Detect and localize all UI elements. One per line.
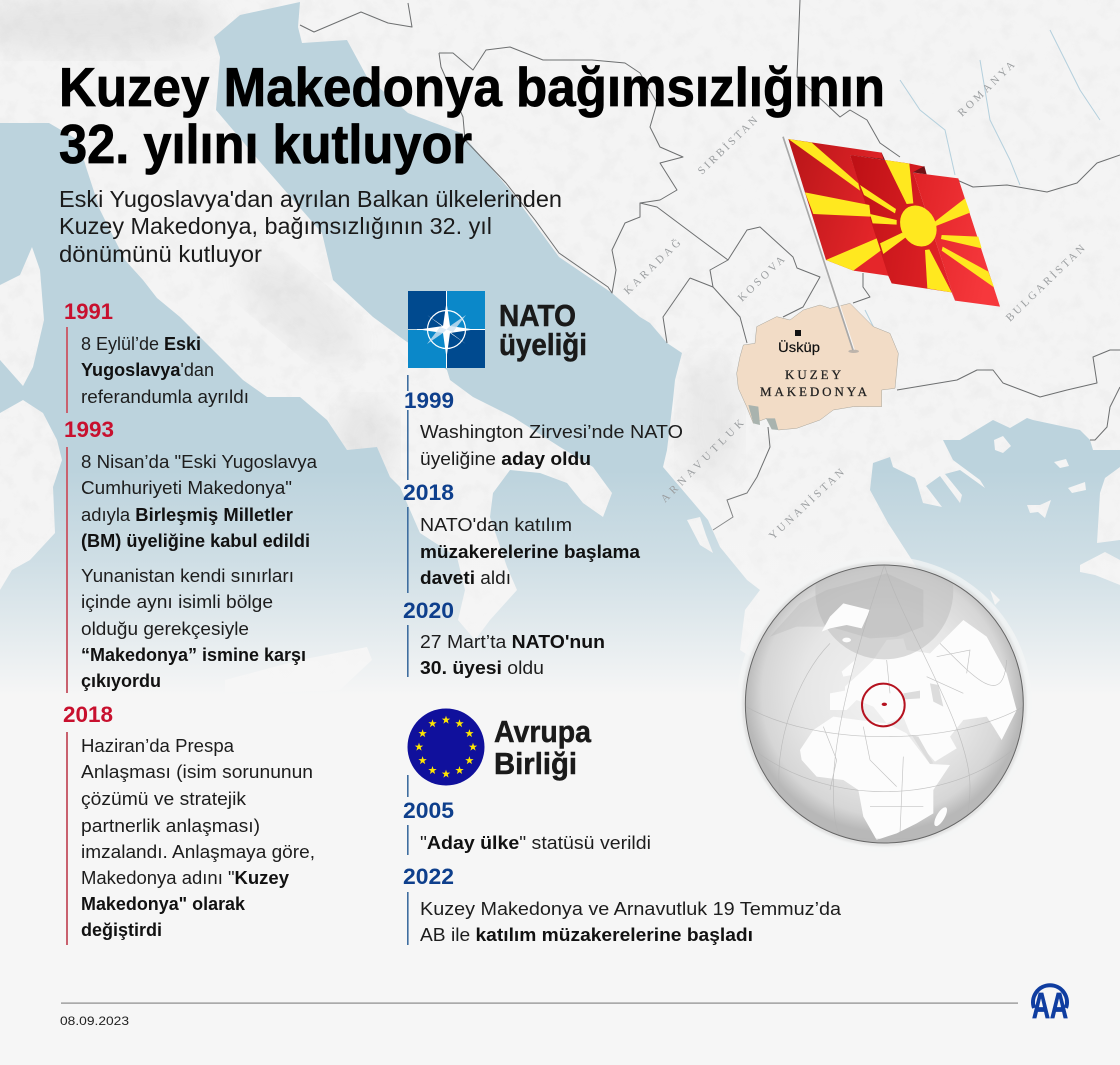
globe halo [737,556,1032,852]
land: Europe and Asia [830,620,1017,762]
2018 text: imzalandı. Anlaşmaya göre, [81,842,315,862]
2018 text [420,515,641,588]
heading: Avrupa Birliği [494,714,592,781]
heading: NATO üyeliği: üyeliği [499,327,587,362]
2022 text: Kuzey Makedonya ve Arnavutluk 19 Temmuz’da [420,899,842,919]
EU timeline lines [407,775,409,945]
2020 text [420,632,605,678]
title: 32. yılını kutluyor [59,113,472,175]
1991 text: 8 Eylül’de Eski [81,334,201,354]
heading: NATO üyeliği [499,298,587,362]
2018 text [81,736,315,940]
1993 text [81,452,318,691]
label: Bulgaristan: BULGARİSTAN [1004,243,1088,324]
map labels [622,59,1088,542]
label: Karadağ: KARADAĞ [622,237,683,297]
year 2018: 2018 [63,702,113,727]
1993 text: içinde aynı isimli bölge [81,592,273,612]
1993 text: Cumhuriyeti Makedonya" [81,478,292,498]
background map of the Balkans and Italy [0,0,1120,700]
label: Arnavutluk: ARNAVUTLUK [659,417,746,505]
subtitle: Eski Yugoslavya'dan ayrılan Balkan ülkelerinden [59,186,562,212]
1999 text [420,422,683,469]
year 1993: 1993 [64,417,114,442]
arctic region [816,566,953,660]
icon: NATO logo [408,291,485,368]
1999 text: üyeliğine aday oldu [420,449,591,469]
1993 text: çıkıyordu [81,671,161,691]
2005 text: "Aday ülke " statüsü verildi [420,833,651,853]
footer rule [61,1002,1018,1004]
2018 entry line [66,732,68,945]
heading: Avrupa Birliği: Avrupa [494,714,592,749]
subtitle: Kuzey Makedonya, bağımsızlığının 32. yıl [59,213,492,239]
2018 text: Haziran’da Prespa [81,736,235,756]
subtitle: dönümünü kutluyor [59,241,262,267]
2022 text: AB ile katılım müzakerelerine başladı [420,925,753,945]
2020 text: 30. üyesi oldu [420,658,544,678]
2018 text: partnerlik anlaşması) [81,816,260,836]
title [59,56,885,175]
2020 text: 27 Mart’ta NATO'nun [420,632,605,652]
1993 text: (BM) üyeliğine kabul edildi [81,531,310,551]
label: Kuzey Makedonya: KUZEY [785,367,842,382]
1991 entry line [66,327,68,413]
1991 text: referandumla ayrıldı [81,387,249,407]
label: Romanya: ROMANYA [956,59,1017,119]
2018 text: Anlaşması (isim sorununun [81,762,313,782]
capital marker [795,330,801,336]
panel: European Union [403,708,842,945]
icon: EU flag circle [408,708,484,786]
NATO timeline lines [407,375,409,677]
2018 text: çözümü ve stratejik [81,789,247,809]
inland seas [903,691,920,699]
year 2020: 2020 [403,598,454,623]
label: Kuzey Makedonya: MAKEDONYA [760,384,868,399]
year 1991: 1991 [64,299,113,324]
1993 text: adıyla Birleşmiş Milletler [81,505,293,525]
heading: NATO üyeliği: NATO [499,298,576,333]
1999 text: Washington Zirvesi’nde NATO [420,422,683,442]
2018 text: Makedonya adını "Kuzey [81,868,289,888]
2018 text: NATO'dan katılım [420,515,572,535]
year 2005: 2005 [403,798,454,823]
flag pole [783,136,859,353]
label: Yunanistan: YUNANİSTAN [767,467,847,542]
2018 text: Makedonya" olarak [81,894,246,914]
icon: Anadolu Agency logo: AA [1032,985,1068,1026]
label: Kuzey Makedonya [760,367,868,399]
year 2018: 2018 [403,480,454,505]
North Macedonia region on map [737,303,898,430]
graticule and borders [746,565,1023,843]
2022 text [420,899,842,945]
title: Kuzey Makedonya bağımsızlığının [59,56,885,118]
year 1999: 1999 [404,388,454,413]
year 2022: 2022 [403,864,454,889]
land: Greenland and Iceland [822,603,870,632]
date: 08.09.2023 [60,1014,129,1028]
1993 text: olduğu gerekçesiyle [81,619,249,639]
1993 text: 8 Nisan’da "Eski Yugoslavya [81,452,318,472]
land: Africa [800,717,950,840]
1991 text: Yugoslavya'dan [81,360,214,380]
subtitle [59,186,562,267]
heading: Avrupa Birliği: Birliği [494,746,577,781]
panel: independence timeline [63,299,318,945]
flag cloth [788,139,1000,307]
label: Sırbistan: SIRBİSTAN [696,114,760,177]
2018 text: müzakerelerine başlama [420,542,641,562]
panel: NATO membership [403,291,683,678]
1993 text: “Makedonya” ismine karşı [81,645,306,665]
1993 entry line [66,447,68,693]
locator circle [862,684,905,726]
label: Üsküp: Üsküp [778,338,820,355]
icon: Anadolu Agency logo [1032,985,1068,1026]
2018 text: daveti aldı [420,568,511,588]
North Macedonia flag on a pole [783,136,1000,353]
globe rim [745,565,1023,843]
2018 text: değiştirdi [81,920,162,940]
1993 text: Yunanistan kendi sınırları [81,566,294,586]
1991 text [81,334,249,407]
label: Kosova: KOSOVA [736,254,787,304]
globe locator map [742,558,1027,846]
